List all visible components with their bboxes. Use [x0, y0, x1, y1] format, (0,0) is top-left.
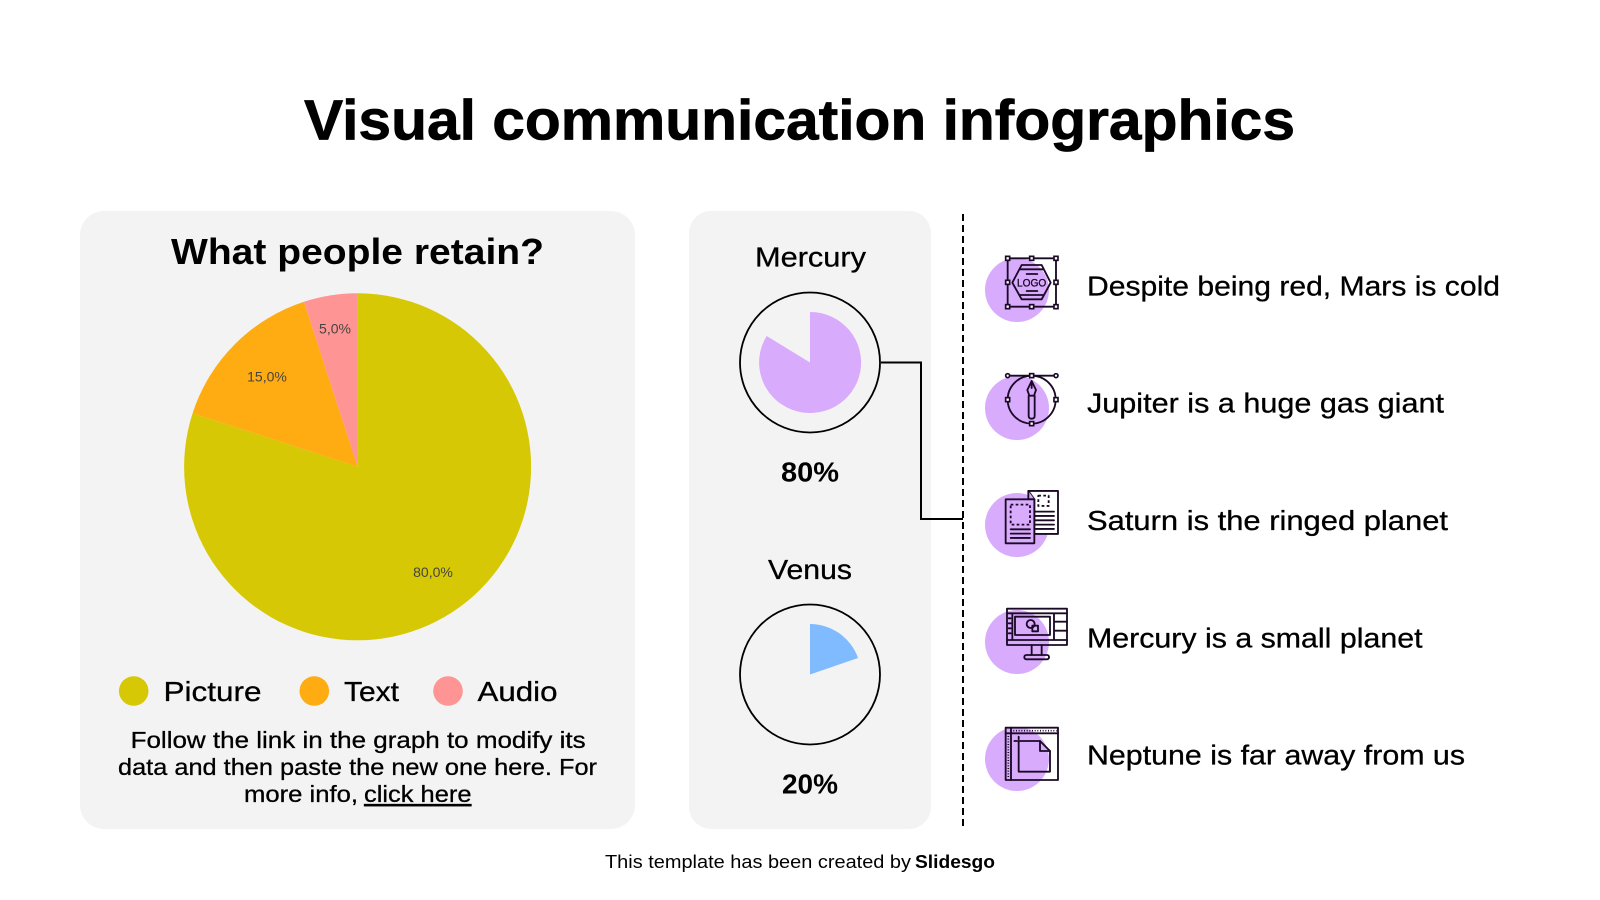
item text: Saturn is the ringed planet — [1087, 505, 1448, 536]
item text: Mercury is a small planet — [1087, 622, 1423, 654]
Venus value: 20% — [782, 768, 838, 800]
Mercury gauge — [740, 292, 880, 432]
legend: Text — [344, 676, 399, 707]
pie chart: 15,0% — [247, 368, 287, 384]
pie chart — [184, 293, 531, 640]
item: Saturn — [985, 491, 1448, 557]
Mercury label: Mercury — [755, 242, 866, 272]
item text: Despite being red, Mars is cold — [1087, 270, 1500, 302]
footer credit: Slidesgo — [915, 852, 995, 872]
pie chart: 5,0% — [319, 320, 351, 336]
footer credit: This template has been created by — [605, 852, 911, 872]
item: Mercury — [985, 609, 1423, 674]
item: Jupiter — [985, 374, 1444, 440]
description text — [118, 727, 597, 807]
icon: logo: LOGO — [1017, 278, 1046, 290]
description text: more info, — [244, 781, 358, 807]
legend: Picture — [164, 676, 262, 707]
panel heading: What people retain? — [171, 231, 544, 272]
item: Neptune — [985, 727, 1465, 791]
icon: monitor — [1007, 609, 1067, 659]
Mercury value: 80% — [781, 456, 839, 488]
description text: data and then paste the new one here. For — [118, 754, 597, 780]
title: Visual communication infographics — [304, 88, 1295, 152]
legend: Audio — [478, 676, 558, 707]
icon: artboard — [1006, 728, 1058, 780]
icon: pen tool — [1006, 374, 1058, 426]
connector arrow — [881, 362, 963, 519]
panel: planets — [689, 211, 931, 829]
description text: Follow the link in the graph to modify its — [131, 727, 586, 753]
Venus label: Venus — [768, 554, 852, 585]
item: Mars — [985, 256, 1500, 322]
Venus gauge — [740, 604, 880, 744]
legend — [119, 676, 558, 707]
icon: logo — [1006, 256, 1058, 309]
description text: click here — [364, 781, 472, 807]
item text: Jupiter is a huge gas giant — [1087, 388, 1444, 418]
panel: what people retain — [80, 211, 635, 829]
pie chart: 80,0% — [413, 564, 453, 580]
icon: documents — [1006, 491, 1058, 543]
item text: Neptune is far away from us — [1087, 740, 1465, 770]
